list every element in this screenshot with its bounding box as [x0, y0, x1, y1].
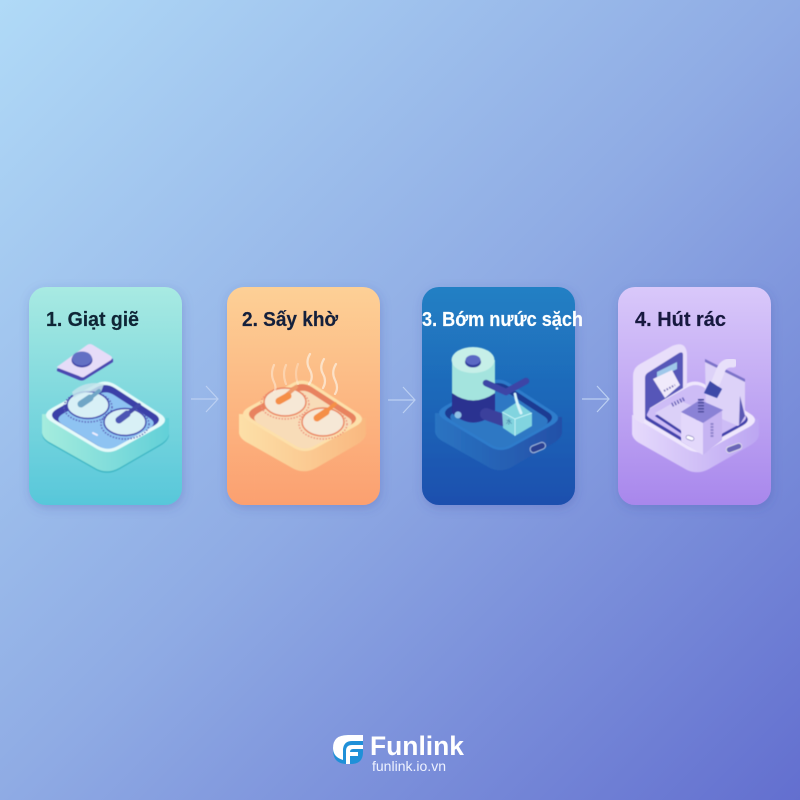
icon: nozzle	[704, 363, 733, 398]
panel: step 1	[29, 287, 182, 505]
card 1	[29, 287, 182, 505]
icon: washing tray	[42, 382, 169, 473]
icon: collection box	[681, 399, 723, 455]
arrow 1	[191, 386, 218, 412]
icon: platform	[655, 399, 705, 434]
icon: pump tray	[435, 380, 562, 470]
card 3	[422, 287, 575, 505]
website: funlink.io.vn	[372, 758, 446, 774]
icon: drying tray	[239, 380, 366, 471]
logo icon	[333, 735, 363, 764]
logo: Funlink	[333, 731, 465, 774]
icon: button tablet	[57, 344, 113, 380]
heading 3: 3. Bớm nưức sặch	[422, 309, 583, 331]
panel: step 4	[618, 287, 771, 505]
icon: bag	[705, 359, 745, 426]
icon: vacuum tray	[632, 382, 759, 472]
panel: step 3	[422, 287, 583, 505]
heading 1: 1. Giạt giẽ	[46, 309, 139, 331]
icon: glass of water: 水	[506, 418, 512, 426]
icon: steam	[272, 354, 337, 394]
heading 2: 2. Sấy khờ	[242, 309, 339, 331]
icon: vacuum machine	[633, 344, 687, 424]
heading 4: 4. Hút rác	[635, 309, 726, 331]
arrow 3	[582, 386, 609, 412]
brand name: Funlink	[370, 731, 465, 761]
panel: step 2	[227, 287, 380, 505]
card 2	[227, 287, 380, 505]
arrow 2	[388, 387, 415, 413]
icon: water tank	[452, 347, 526, 422]
card 4	[618, 287, 771, 505]
icon: glass of water	[502, 394, 532, 436]
